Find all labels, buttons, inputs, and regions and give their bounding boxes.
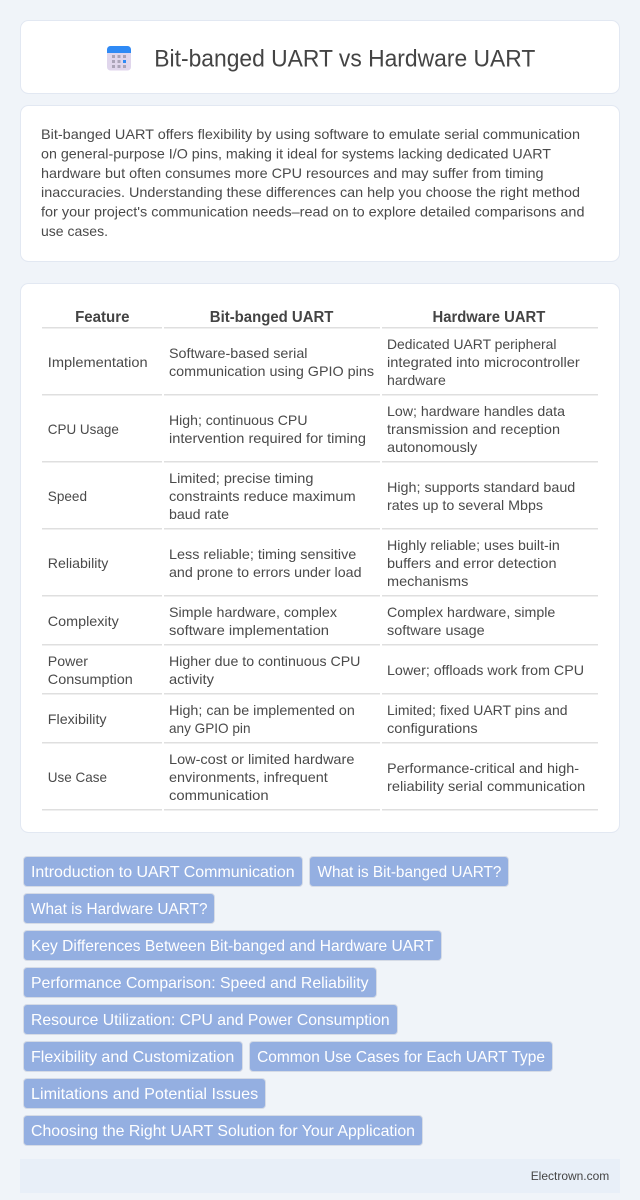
row: power consumption: Higher due to continuous CPU [169, 653, 360, 669]
row: cpu usage: transmission and reception [387, 421, 560, 437]
row: complexity: software implementation [169, 622, 329, 638]
row: speed [48, 470, 575, 522]
tag: introduction: Introduction to UART Communication [31, 864, 295, 881]
row: reliability: buffers and error detection [387, 555, 556, 571]
tag: hardware [24, 894, 214, 924]
tag: use cases: Common Use Cases for Each UART Type [257, 1049, 545, 1066]
panel: comparison table [20, 284, 620, 832]
tag: introduction [24, 856, 302, 886]
footer credit: Electrown.com [531, 1169, 609, 1183]
title panel [20, 20, 620, 94]
row: speed: Limited; precise timing [169, 470, 313, 486]
row: cpu usage: autonomously [387, 439, 477, 455]
row: flexibility: High; can be implemented on [169, 702, 355, 718]
row: power consumption: Power [48, 653, 88, 669]
row: power consumption: Consumption [48, 671, 133, 687]
row: implementation: Implementation [48, 354, 148, 370]
row: complexity: software usage [387, 622, 485, 638]
row: flexibility: Limited; fixed UART pins and [387, 702, 568, 718]
row: power consumption: activity [169, 671, 214, 687]
tag: flexibility [24, 1042, 242, 1072]
row: use case: reliability serial communication [387, 778, 585, 794]
row: speed: High; supports standard baud [387, 479, 575, 495]
intro paragraph [41, 126, 584, 239]
row: reliability: Less reliable; timing sensitive [169, 546, 357, 562]
row: use case: Low-cost or limited hardware [169, 751, 355, 767]
tag: resource utilization: Resource Utilization: CPU and Power Consumption [31, 1012, 390, 1029]
row: implementation [48, 336, 580, 388]
tag: choosing: Choosing the Right UART Solution for Your Application [31, 1123, 415, 1140]
intro paragraph: on general-purpose I/O pins, making it ideal for systems lacking dedicated UART [41, 145, 551, 161]
title: Bit-banged UART vs Hardware UART [154, 46, 536, 72]
tag: performance [24, 968, 376, 998]
intro paragraph: Bit-banged UART offers flexibility by using software to emulate serial communication [41, 126, 580, 142]
tag: hardware: What is Hardware UART? [31, 901, 208, 918]
tag: choosing [24, 1116, 422, 1146]
intro paragraph: inaccuracies. Understanding these differences can help you choose the right method [41, 184, 580, 200]
tag: flexibility: Flexibility and Customization [31, 1049, 234, 1066]
row: reliability: Reliability [48, 555, 108, 571]
row: speed: rates up to several Mbps [387, 497, 543, 513]
intro paragraph: for your project's communication needs–read on to explore detailed comparisons and [41, 204, 584, 220]
row: cpu usage: High; continuous CPU [169, 412, 308, 428]
tag: bit-banged: What is Bit-banged UART? [318, 864, 501, 881]
tag: key differences: Key Differences Between Bit-banged and Hardware UART [31, 938, 434, 955]
row: implementation: communication using GPIO pins [169, 363, 374, 379]
row: implementation: integrated into microcontroller [387, 354, 580, 370]
row: reliability: mechanisms [387, 573, 468, 589]
tag: key differences [24, 930, 442, 960]
row: complexity: Simple hardware, complex [169, 604, 337, 620]
row: speed: baud rate [169, 506, 229, 522]
row: power consumption [48, 653, 584, 687]
row: power consumption: Lower; offloads work from CPU [387, 662, 584, 678]
row: implementation: hardware [387, 372, 446, 388]
tag: limitations [24, 1078, 266, 1108]
tag: limitations: Limitations and Potential Issues [31, 1086, 258, 1103]
row: use case: environments, infrequent [169, 769, 328, 785]
tag: resource utilization [24, 1004, 398, 1034]
tag: performance: Performance Comparison: Speed and Reliability [31, 975, 369, 992]
row: implementation: Dedicated UART peripheral [387, 336, 556, 352]
topic tags [24, 856, 552, 1146]
icon: calendar [107, 46, 131, 70]
row: reliability: and prone to errors under load [169, 564, 362, 580]
row: cpu usage: intervention required for timing [169, 430, 366, 446]
table header: Bit-banged UART [210, 309, 334, 326]
row: implementation: Software-based serial [169, 345, 308, 361]
row: flexibility [48, 702, 568, 736]
row: complexity: Complexity [48, 613, 119, 629]
footer [20, 1159, 620, 1193]
row: use case: communication [169, 787, 269, 803]
row: use case: Use Case [48, 769, 107, 785]
tag: use cases [250, 1042, 552, 1072]
row: flexibility: configurations [387, 720, 478, 736]
tag: bit-banged [310, 856, 508, 886]
row: cpu usage: CPU Usage [48, 421, 119, 437]
row: speed: Speed [48, 488, 87, 504]
row: complexity: Complex hardware, simple [387, 604, 556, 620]
row: speed: constraints reduce maximum [169, 488, 356, 504]
row: reliability: Highly reliable; uses built-in [387, 537, 560, 553]
panel: intro [20, 106, 620, 262]
row: cpu usage: Low; hardware handles data [387, 403, 565, 419]
row: flexibility: Flexibility [48, 711, 107, 727]
table header: Feature [75, 309, 130, 326]
row: complexity [48, 604, 556, 638]
row: flexibility: any GPIO pin [169, 720, 250, 736]
row: cpu usage [48, 403, 565, 455]
table header: Hardware UART [432, 309, 546, 326]
row: reliability [48, 537, 560, 589]
intro paragraph: use cases. [41, 223, 108, 239]
intro paragraph: hardware but often consumes more CPU resources and may suffer from timing [41, 165, 544, 181]
row: use case [48, 751, 585, 803]
table header [75, 309, 546, 326]
row: use case: Performance-critical and high- [387, 760, 579, 776]
